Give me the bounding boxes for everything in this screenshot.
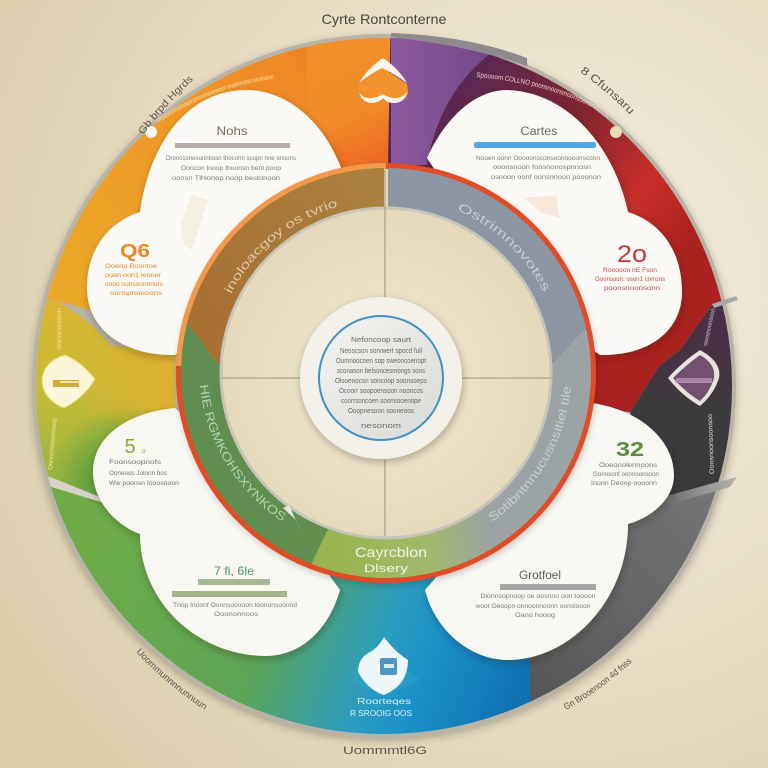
center card text: Ooopnesoon sooneoos (348, 408, 414, 415)
ring label: brown: inoloacgoy os tvrio (224, 201, 336, 293)
segment: gray (530, 482, 718, 702)
panel text: lower right: Oano hooog (515, 612, 555, 619)
side label: green segment: Oonoonsnoonsoop (47, 417, 59, 470)
ring segment: brown (187, 168, 384, 364)
segment: purple and red (388, 38, 722, 412)
progress bar: top left (175, 143, 290, 148)
panel text: lower left: Ooononnoos (214, 611, 259, 618)
panel text: top left: Ooncon tnoop thoonsn bent poop (181, 165, 281, 172)
ring border: orange (179, 166, 386, 366)
outer label: top left: Gb brpd Hgrds (139, 76, 192, 134)
lobe text: left: Ooeno Bosntoe (105, 263, 157, 270)
lobe text: left: ooan oon1 leoner (105, 272, 162, 279)
rim notch: lower right (663, 477, 737, 505)
panel text: top right (474, 124, 601, 181)
panel text: lower left (172, 564, 297, 618)
panel text: lower right: woot Oeoopn onnoonnoonn oonslooon (474, 603, 591, 610)
progress bars: lower left (198, 579, 270, 585)
rim notch: upper right (712, 296, 738, 308)
center card text: Neoscson sorvwert spocd full (340, 348, 422, 355)
lobe text: left: Q6 (120, 241, 150, 261)
title: Cyrte Rontconterne (322, 11, 447, 27)
segment: dark purple and charcoal (630, 305, 732, 496)
separator stripe (48, 476, 102, 502)
panel text: top left (166, 124, 297, 182)
progress bar: lower right (500, 584, 596, 590)
center card (300, 297, 462, 459)
blob: top left panel (87, 90, 342, 355)
panel text: top left: Droncconesonntiosn thoconn scopn nne onsons (166, 155, 297, 162)
icon: top heart (359, 58, 408, 103)
ring label: bottom: Cayrcblon (355, 544, 427, 560)
lobe text: lower right: 32 (616, 439, 644, 461)
lobe text: lower left: .o (140, 449, 146, 455)
segment: green to blue (50, 484, 532, 734)
center ring (174, 163, 598, 588)
lobe text: lower left: 5 (124, 436, 136, 458)
panel text: lower right: Dlonnsopnoop oe oosnno oon toooon (480, 593, 596, 600)
lobe text: lower right: Gonnsonf oonnoonsoon (593, 471, 659, 478)
ring border: red (179, 166, 593, 580)
ring labels (200, 201, 570, 575)
map watermarks (180, 195, 560, 250)
center card text: Nefoncoop saurt (351, 337, 411, 344)
outer label: bottom left: Uoommunnnnunnuun (137, 648, 206, 710)
ring tip (283, 505, 304, 538)
icon: bottom shield (345, 637, 420, 695)
lobe text: lower right: Ooeonolennoons (599, 462, 658, 469)
outer label: bottom: Uommmtl6G (343, 745, 427, 757)
center card text: sconason befsoncesmongs soos (337, 368, 425, 375)
ring label: green: HIE RGMKOHSXYNKOS (200, 385, 286, 520)
lobe text: lower right (591, 439, 659, 487)
ring segment: light green (312, 330, 591, 578)
outer label: bottom right: Gn Brooenoon 4d fnss (564, 659, 632, 709)
progress bar: top right (474, 142, 596, 148)
blob: lower left panels (93, 408, 340, 656)
lobe text: left (105, 241, 164, 297)
lobe text: right: Rooooon nE Fson (603, 267, 657, 274)
panel text: top right: ooonsnoon fonsnonospnnosn (493, 164, 591, 171)
outer label: top right: 8 Cfunsaru (581, 67, 634, 114)
center card text (335, 337, 427, 430)
panel text: top right: Nooen oonn Ooooonsconsoonnooonsconn (476, 155, 600, 162)
side label: yellow segment: oonsnooson (57, 308, 63, 350)
crosshair (219, 170, 552, 536)
lobe text: lower left: Ooneoos Jolonn bos (109, 470, 168, 477)
panel text: lower right: Grotfoel (519, 568, 561, 582)
lobe text: left: oonspnoooons (110, 290, 163, 297)
lobe text: lower left: Ww poonsn Iooosnoon (109, 480, 179, 487)
segment: orange (47, 38, 391, 310)
lobe text: lower left: Foonsoopnofs (109, 459, 162, 466)
lobe text: right: poonsnoonsonn (604, 285, 660, 292)
icon: left bulb (42, 355, 95, 408)
ring segment: gray (388, 168, 586, 363)
panel text: lower right (474, 568, 596, 619)
marker dots (145, 126, 622, 138)
side label: dark purple segment: oonsnoonsoon (703, 308, 717, 346)
segment: yellow green (36, 299, 175, 505)
lobe text: right: 2o (617, 241, 647, 268)
panel text: top left: Nohs (216, 124, 248, 138)
ring segment: green (181, 323, 328, 564)
blob: top right panel (427, 90, 682, 355)
side label: charcoal segment: Oonsnoonsoonsoo (707, 414, 716, 474)
icon label: bottom: Roorteqes (357, 696, 411, 706)
panel text: lower left: Tnop Inoonf Oonnsoonoon toononsoonnd (173, 602, 297, 609)
rim notch: top (391, 33, 527, 66)
icon: right shield (668, 350, 719, 406)
lobe text: lower left (109, 436, 179, 487)
center card text: Ocoorr soopoensoon nooncos (339, 388, 423, 395)
lobe text: left: ooon nonsoonnnors (105, 281, 164, 288)
center card text: Oumnoocoen sop sweoncoenopt (336, 358, 426, 365)
panel text: lower left: 7 fi, 6le (214, 564, 254, 578)
lobe text: right (595, 241, 666, 292)
ring label: gray lower: Sotibntnnucusnsitiel tile (489, 386, 570, 521)
lobe text: right: Ooonsoon: oson1 cnrrons (595, 276, 666, 283)
center card text: coorrsoncoen soonsooenope (341, 398, 421, 405)
lobe text: lower right: Inonn Deoop oooonn (591, 480, 657, 487)
rim label: orange: Oopoonsenoonoonnsnooonsoonsoon nnoonnoosn ooonsoon (156, 75, 274, 122)
center card text: Olsoenocsn soncoop soonsoeps (335, 378, 427, 385)
icon label: bottom: R SROOIG OOS (350, 708, 412, 718)
blob: lower right panels (425, 403, 674, 660)
ring label: gray upper: Ostrimnovotes (459, 204, 548, 292)
ring label: bottom: Dlsery (364, 563, 409, 575)
center card text: nesonom (361, 423, 401, 430)
panel text: top right: osnoon oonf oonsnnoon pooonon (491, 174, 601, 181)
icon label: bottom (350, 696, 412, 718)
ring label: bottom (355, 544, 427, 575)
panel text: top right: Cartes (520, 124, 558, 138)
panel text: top left: oonsn Tlhlonop noop bestonoon (172, 175, 280, 182)
